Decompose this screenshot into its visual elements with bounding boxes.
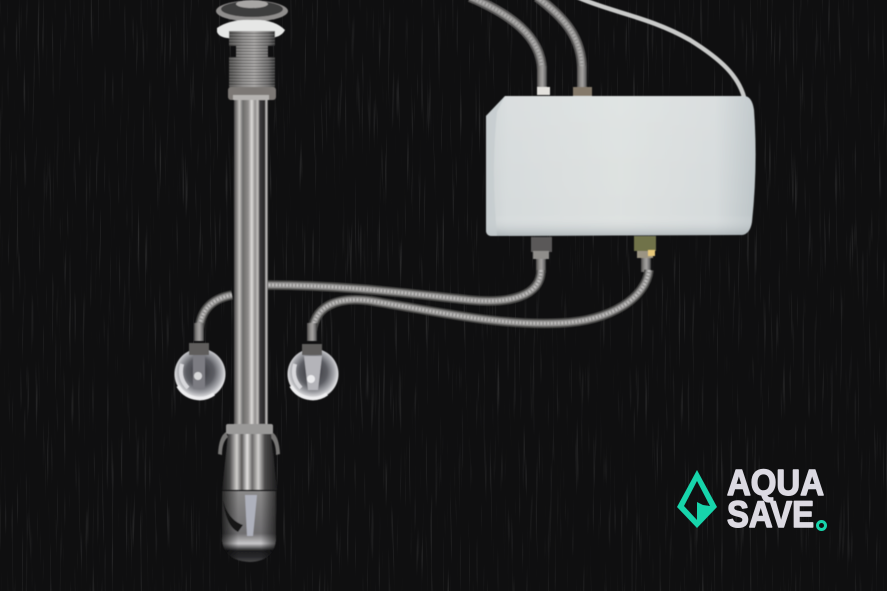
control unit box: [486, 96, 756, 236]
product photo: [174, 0, 756, 562]
hoses to valves: [199, 270, 649, 337]
right valve: [288, 323, 338, 400]
logo dot: [818, 522, 826, 530]
vertical drain tube: [234, 98, 268, 426]
bottom fittings: [531, 236, 656, 273]
left valve: [174, 323, 226, 400]
logo: AQUA SAVE: [677, 462, 826, 535]
logo icon: [677, 470, 717, 528]
waste fitting top: [216, 0, 288, 100]
logo wordmark: AQUA: [727, 462, 824, 503]
trap: [218, 424, 280, 562]
logo wordmark: [727, 462, 824, 535]
logo wordmark: SAVE: [727, 494, 814, 535]
power cable: [577, 0, 744, 97]
supply hoses above the unit: [470, 0, 582, 70]
top fittings: [537, 66, 592, 96]
